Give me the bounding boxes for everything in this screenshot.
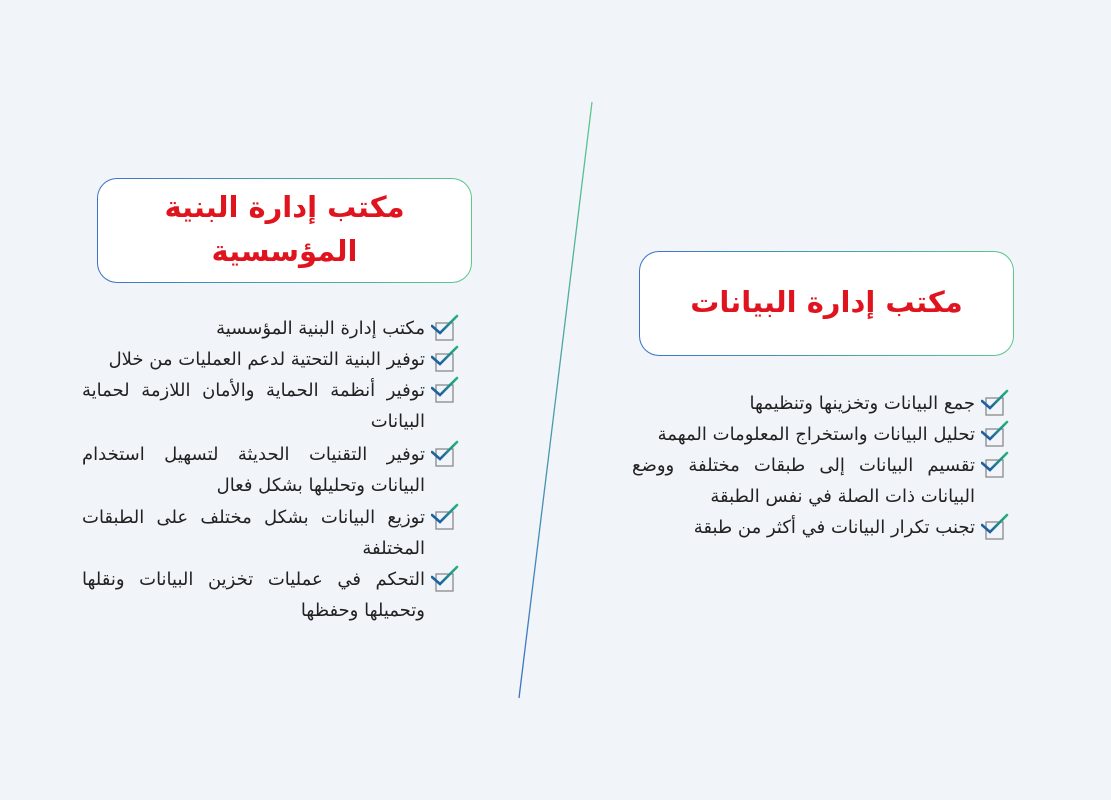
panel: left heading box: المؤسسية	[212, 234, 357, 268]
panel: left heading box	[97, 178, 472, 283]
panel: right heading box	[639, 251, 1014, 356]
list: left items	[82, 314, 458, 621]
list: left items: توزيع البيانات بشكل مختلف على الطبقات المختلفة	[82, 507, 425, 559]
list: right items: تقسيم البيانات إلى طبقات مختلفة ووضع البيانات ذات الصلة في نفس الطبقة	[632, 455, 975, 507]
list: right items	[632, 390, 1008, 540]
list: left items: توفير أنظمة الحماية والأمان اللازمة لحماية البيانات	[82, 380, 425, 432]
list: right items: تحليل البيانات واستخراج المعلومات المهمة	[658, 424, 975, 445]
panel: left heading box: مكتب إدارة البنية	[164, 190, 405, 224]
list: left items: التحكم في عمليات تخزين البيانات ونقلها وتحميلها وحفظها	[82, 569, 425, 621]
panel: right heading box: مكتب إدارة البيانات	[690, 284, 963, 318]
list: right items: تجنب تكرار البيانات في أكثر من طبقة	[694, 517, 975, 538]
list: left items: توفير البنية التحتية لدعم العمليات من خلال	[109, 349, 425, 370]
list: left items: مكتب إدارة البنية المؤسسية	[216, 318, 425, 339]
list: left items: توفير التقنيات الحديثة لتسهيل استخدام البيانات وتحليلها بشكل فعال	[82, 444, 425, 496]
list: right items: جمع البيانات وتخزينها وتنظيمها	[749, 393, 975, 414]
